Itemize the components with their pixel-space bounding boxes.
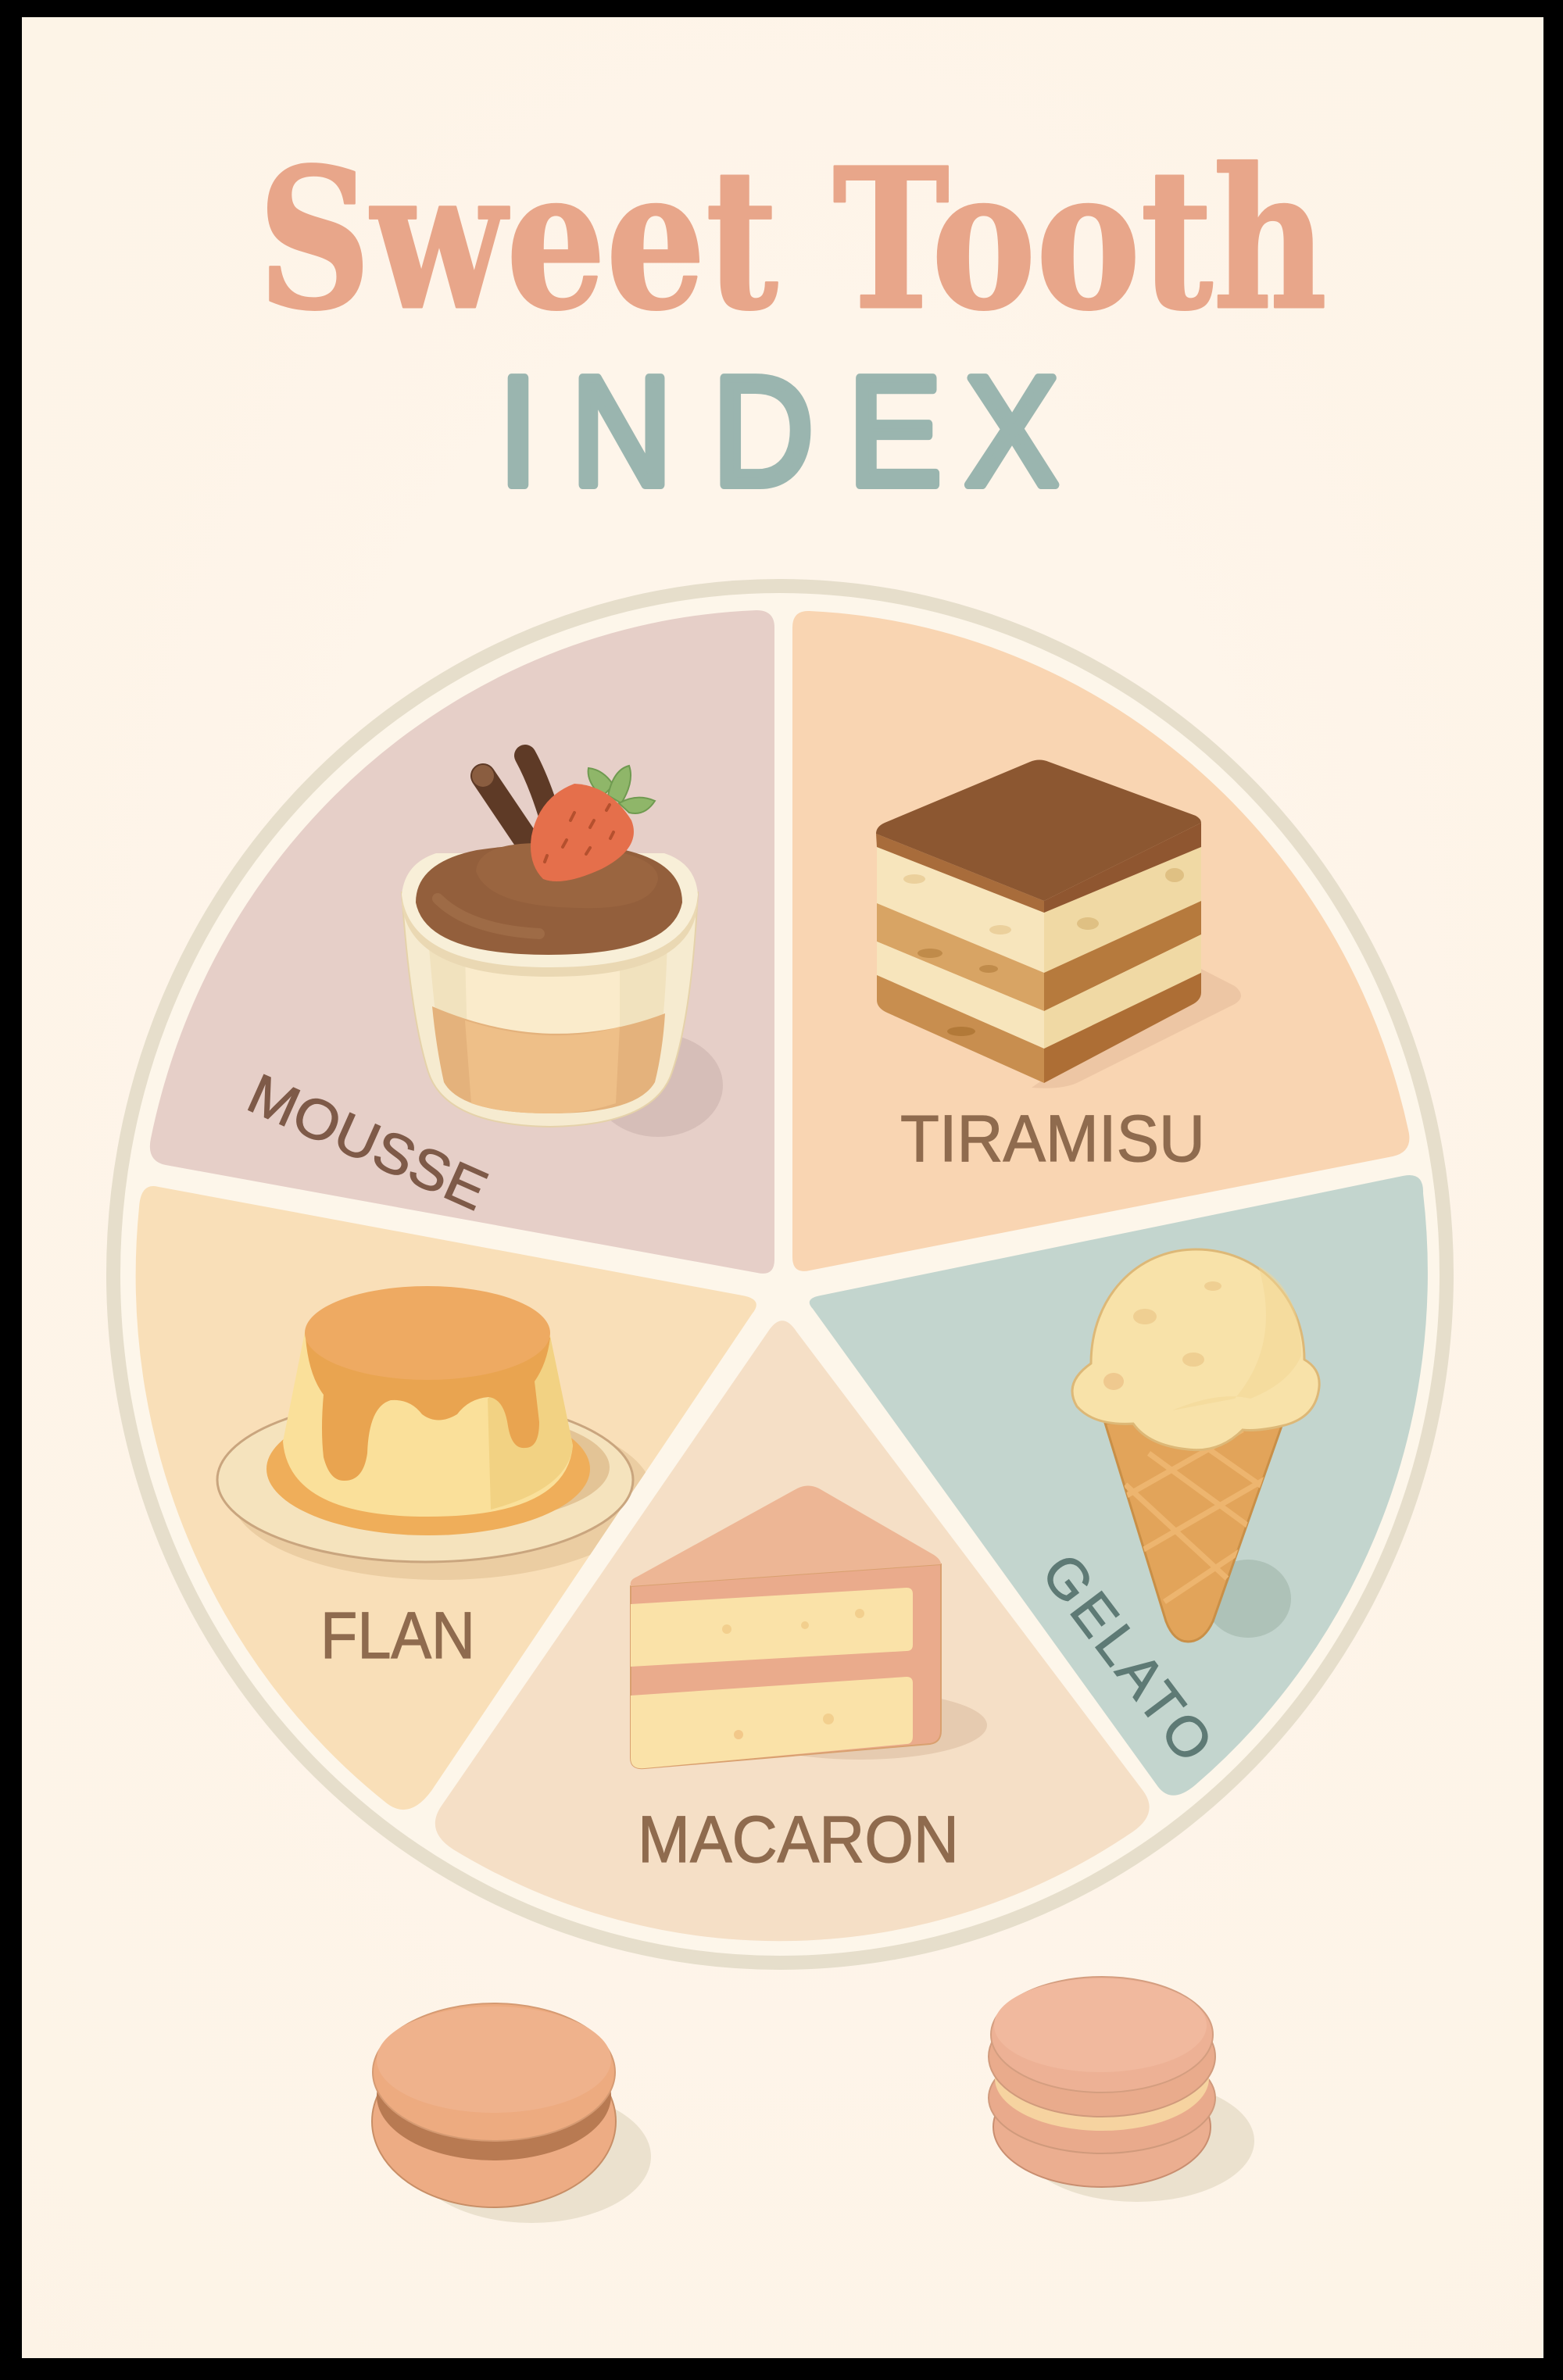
icon: chocolate mousse cup <box>402 756 723 1137</box>
tiramisu segment <box>792 611 1409 1271</box>
label: MACARON: MACARON <box>638 1803 959 1876</box>
label: MOUSSE: MOUSSE <box>238 1063 496 1223</box>
icon: flan on plate <box>217 1286 653 1580</box>
title: Sweet Tooth: Sweet Tooth <box>258 127 1327 353</box>
chart outer ring <box>113 586 1447 1963</box>
icon: layer cake slice <box>631 1486 987 1768</box>
icon: chocolate-filled macaron <box>372 2003 651 2223</box>
macaron segment <box>435 1320 1150 1941</box>
icon: cream-filled macaron <box>989 1977 1254 2202</box>
panel: mousse <box>150 610 774 1274</box>
icon: tiramisu slice <box>876 759 1241 1088</box>
panel: macaron <box>435 1320 1150 1941</box>
subtitle: INDEX: INDEX <box>499 345 1058 519</box>
panel: gelato <box>810 1175 1428 1796</box>
panel: flan <box>136 1186 756 1810</box>
panel: tiramisu <box>792 611 1409 1271</box>
mousse segment <box>150 610 774 1274</box>
pie chart <box>113 586 1447 1963</box>
flan segment <box>136 1186 756 1810</box>
label: GELATO: GELATO <box>1029 1542 1225 1773</box>
label: TIRAMISU: TIRAMISU <box>900 1102 1205 1175</box>
gelato segment <box>810 1175 1428 1796</box>
label: FLAN: FLAN <box>320 1599 475 1672</box>
icon: gelato cone <box>1072 1249 1319 1642</box>
